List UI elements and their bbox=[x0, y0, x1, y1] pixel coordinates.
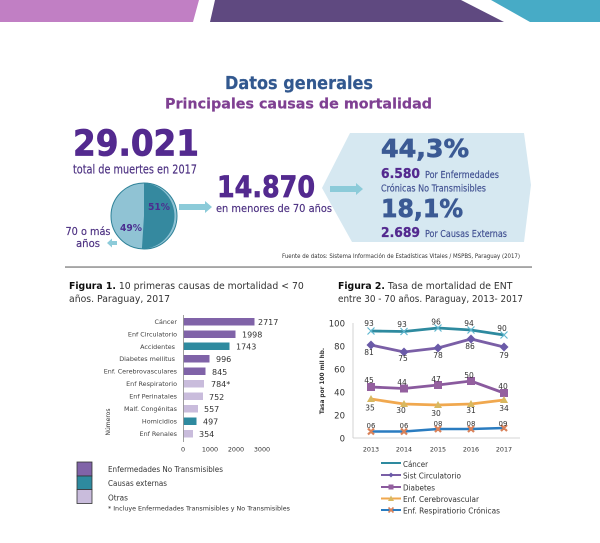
series: cerebrovascular bbox=[365, 395, 509, 418]
series: cerebrovascular: 34 bbox=[499, 404, 509, 413]
series: cancer bbox=[364, 318, 508, 338]
x axis labels bbox=[181, 446, 270, 454]
series: sist circulatorio: 81 bbox=[364, 348, 374, 357]
source note: Fuente de datos: Sistema Información de Estadísticas Vitales / MSPBS, Paraguay (2017) bbox=[282, 253, 520, 260]
category labels: Homicidios bbox=[142, 418, 178, 426]
figure 1 title: Figura 1. 10 primeras causas de mortalidad < 70 bbox=[69, 281, 304, 292]
line chart bbox=[320, 318, 520, 454]
category labels: Accidentes bbox=[140, 343, 176, 351]
panel: breakdown bbox=[322, 133, 531, 242]
series: diabetes: 44 bbox=[397, 378, 407, 387]
arrow: into panel bbox=[330, 183, 363, 195]
value labels: 557 bbox=[204, 405, 219, 414]
series: cancer: 96 bbox=[431, 318, 441, 326]
y axis labels: 0 bbox=[340, 434, 345, 444]
x axis labels: 0 bbox=[181, 446, 185, 454]
figure 2 title: entre 30 - 70 años. Paraguay, 2013- 2017 bbox=[338, 294, 523, 305]
y axis labels: 100 bbox=[329, 320, 345, 330]
arrow: to 70 or more bbox=[107, 238, 117, 248]
category labels: Cáncer bbox=[154, 318, 177, 326]
stat: 2.689: Por Causas Externas bbox=[425, 229, 507, 240]
category labels: Malf. Congénitas bbox=[124, 405, 178, 413]
value labels: 354 bbox=[199, 430, 214, 439]
value labels: 2717 bbox=[258, 318, 278, 327]
title: Datos generales bbox=[225, 74, 373, 94]
category labels: Enf. Cerebrovasculares bbox=[104, 368, 178, 376]
series: cerebrovascular: 35 bbox=[365, 404, 375, 412]
y axis labels bbox=[329, 320, 345, 444]
series: respiratorio cronicas: 08 bbox=[467, 420, 475, 428]
total deaths stat: total de muertes en 2017 bbox=[73, 162, 197, 176]
axes bbox=[353, 323, 520, 438]
series: cancer: 93 bbox=[364, 319, 374, 328]
series: respiratorio cronicas: 08 bbox=[434, 420, 442, 428]
line chart legend: Diabetes bbox=[403, 484, 435, 492]
line chart legend: Enf. Respiratiorio Crónicas bbox=[403, 506, 500, 516]
pie chart: 49% bbox=[120, 223, 142, 234]
series: cerebrovascular: 30 bbox=[396, 406, 406, 415]
line chart legend: Cáncer bbox=[403, 460, 429, 469]
header banner bbox=[0, 0, 600, 22]
series: sist circulatorio: 75 bbox=[398, 354, 408, 363]
series: sist circulatorio: 78 bbox=[433, 351, 443, 360]
line chart legend bbox=[381, 460, 500, 516]
x axis labels: 3000 bbox=[254, 446, 270, 454]
x axis labels: 1000 bbox=[202, 446, 218, 454]
category labels bbox=[104, 318, 178, 438]
series: diabetes: 47 bbox=[431, 375, 441, 384]
x axis labels: 2016 bbox=[463, 446, 479, 454]
value labels: 845 bbox=[212, 368, 227, 377]
value labels: 752 bbox=[209, 393, 224, 402]
x axis labels bbox=[363, 446, 512, 454]
y axis labels: 80 bbox=[334, 342, 345, 352]
total deaths stat: 29.021 bbox=[73, 124, 199, 164]
x axis labels: 2017 bbox=[496, 446, 512, 454]
value labels: 996 bbox=[216, 355, 231, 364]
series: sist circulatorio: 86 bbox=[465, 342, 475, 351]
line chart legend: Sist Circulatorio bbox=[403, 472, 461, 480]
stat: 18,1%: 18,1% bbox=[381, 194, 463, 223]
series: diabetes bbox=[364, 371, 508, 397]
label: 70 o mas anos: 70 o más bbox=[66, 226, 110, 238]
series: cancer: 93 bbox=[397, 320, 407, 329]
subtitle: Principales causas de mortalidad bbox=[165, 96, 432, 112]
stat: 6.580: Por Enfermedades bbox=[425, 170, 499, 181]
pie chart: 51% bbox=[148, 202, 170, 213]
series: cerebrovascular: 30 bbox=[431, 409, 441, 418]
under 70 stat: 14.870 bbox=[217, 170, 315, 204]
series: sist circulatorio: 79 bbox=[499, 351, 509, 360]
stat: 6.580 bbox=[381, 167, 499, 194]
y axis labels: 20 bbox=[334, 412, 345, 422]
series: respiratorio cronicas: 06 bbox=[367, 422, 376, 430]
stat: 2.689 bbox=[381, 226, 507, 241]
bar chart legend: Enfermedades No Transmisibles bbox=[108, 465, 223, 474]
bar chart legend bbox=[77, 462, 290, 512]
x axis labels: 2014 bbox=[396, 446, 412, 454]
bar chart bbox=[104, 315, 278, 454]
x axis labels: 2013 bbox=[363, 446, 379, 454]
stat: 6.580: Crónicas No Transmisibles bbox=[381, 184, 486, 194]
figure 2 title: Figura 2. Tasa de mortalidad de ENT bbox=[338, 281, 513, 292]
series: cancer: 90 bbox=[497, 324, 507, 333]
value labels bbox=[199, 318, 278, 439]
category labels: Enf Circulatorio bbox=[128, 330, 177, 338]
series: diabetes: 40 bbox=[498, 382, 508, 391]
bar chart legend: Causas externas bbox=[108, 479, 167, 488]
series: respiratorio cronicas bbox=[367, 420, 507, 434]
series: diabetes: 45 bbox=[364, 376, 374, 385]
y axis title: Números bbox=[105, 409, 112, 435]
series: sist circulatorio bbox=[364, 334, 509, 363]
figure 1 title bbox=[69, 281, 304, 305]
series: respiratorio cronicas: 06 bbox=[400, 422, 409, 430]
label: 70 o mas anos bbox=[66, 226, 110, 250]
stat: 2.689: 2.689 bbox=[381, 226, 420, 241]
x axis labels: 2015 bbox=[430, 446, 446, 454]
bars bbox=[184, 318, 254, 438]
y axis title: Tasa por 100 mil hb. bbox=[320, 348, 326, 414]
x axis labels: 2000 bbox=[228, 446, 244, 454]
pie chart bbox=[111, 183, 177, 249]
series: cancer: 94 bbox=[464, 319, 474, 328]
label: 70 o mas anos: años bbox=[76, 238, 100, 250]
series: cerebrovascular: 31 bbox=[466, 406, 476, 415]
figure 1 title: años. Paraguay, 2017 bbox=[69, 294, 170, 305]
series: respiratorio cronicas: 09 bbox=[499, 420, 507, 428]
y axis labels: 40 bbox=[334, 388, 345, 398]
value labels: 1998 bbox=[242, 330, 262, 340]
stat: 44,3%: 44,3% bbox=[381, 134, 469, 163]
under 70 stat: en menores de 70 años bbox=[216, 203, 332, 215]
stat: 6.580: 6.580 bbox=[381, 167, 420, 182]
line chart legend: Enf. Cerebrovascular bbox=[403, 495, 480, 504]
bar chart legend: * Incluye Enfermedades Transmisibles y No Transmisibles bbox=[108, 506, 290, 512]
value labels: 1743 bbox=[236, 342, 256, 352]
category labels: Enf Perinatales bbox=[129, 392, 178, 400]
arrow: pie to under 70 bbox=[179, 201, 212, 213]
figure 2 title bbox=[338, 281, 523, 305]
category labels: Enf Respiratorio bbox=[126, 380, 177, 388]
series: diabetes: 50 bbox=[464, 371, 474, 380]
value labels: 497 bbox=[203, 418, 218, 426]
bar chart legend: Otras bbox=[108, 494, 128, 502]
category labels: Enf Renales bbox=[140, 430, 178, 438]
value labels: 784* bbox=[211, 380, 230, 389]
category labels: Diabetes mellitus bbox=[119, 355, 176, 363]
y axis labels: 60 bbox=[334, 366, 345, 376]
